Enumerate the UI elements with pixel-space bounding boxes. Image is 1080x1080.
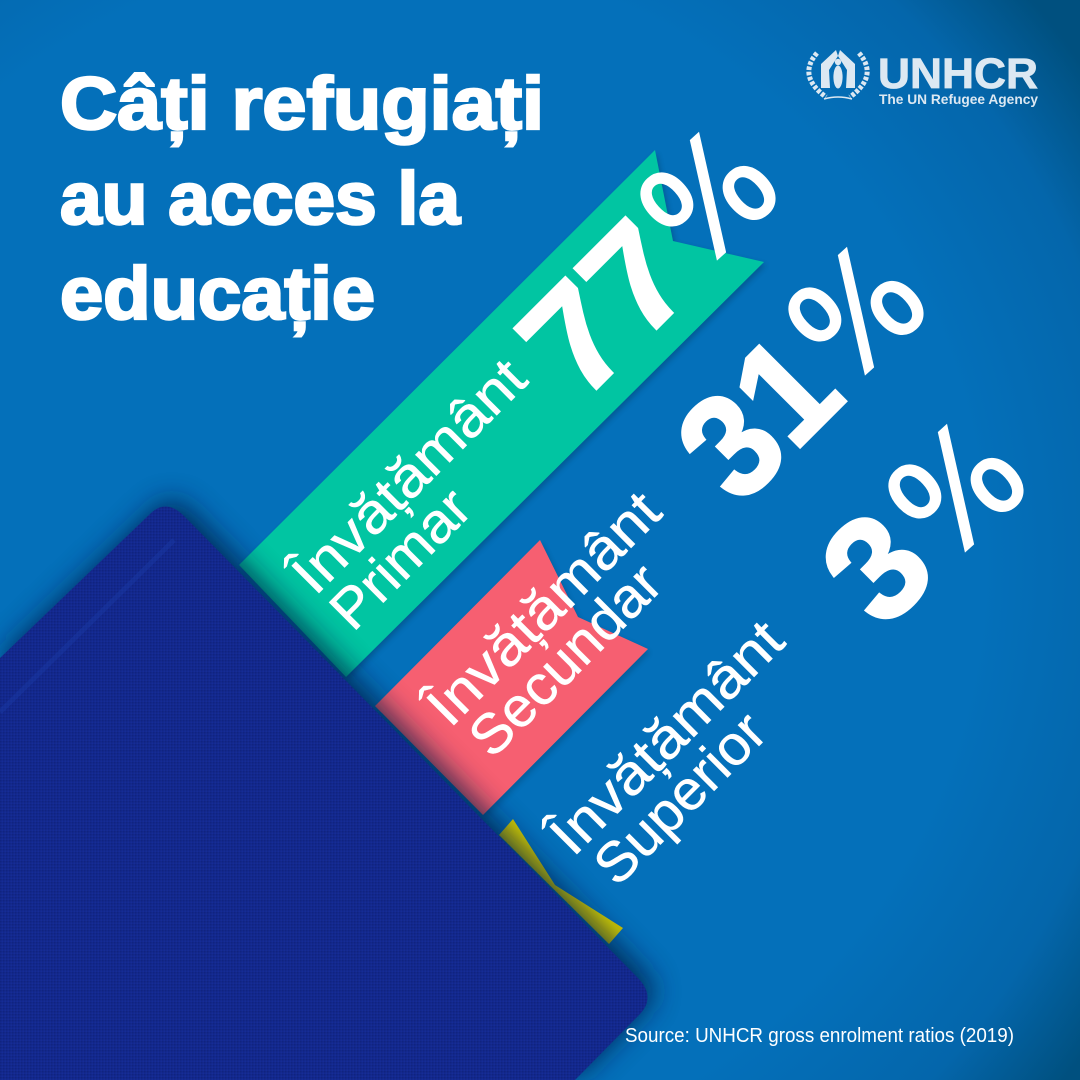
- value: 3%: 3: [790, 481, 963, 654]
- icon: UNHCR emblem: [809, 50, 867, 99]
- title: Câți refugiați: [60, 62, 544, 146]
- title: educație: [60, 252, 375, 336]
- book shadow: [6, 500, 654, 1074]
- value: 31%: 31: [646, 305, 871, 530]
- source note: Source: UNHCR gross enrolment ratios (2019): [625, 1025, 1014, 1047]
- book: [0, 506, 648, 1080]
- title: au acces la: [60, 157, 461, 240]
- ribbon: primary (teal): [239, 150, 766, 680]
- label: Învățământ Primar: Primar: [317, 475, 483, 641]
- label: Învățământ Secundar: Secundar: [456, 551, 674, 768]
- label: Învățământ Primar: Învățământ: [277, 346, 539, 607]
- logo: UNHCR: [809, 50, 1038, 107]
- title: [60, 62, 544, 336]
- value: 31%: %: [757, 211, 958, 415]
- logo tagline: The UN Refugee Agency: [879, 91, 1038, 107]
- value: 3%: [790, 388, 1058, 654]
- ribbon: tertiary (yellow): [499, 819, 623, 944]
- label: Învățământ Superior: Superior: [581, 699, 778, 896]
- label: Învățământ Superior: Învățământ: [535, 607, 796, 868]
- logo wordmark: UNHCR: [878, 50, 1038, 98]
- ribbon: secondary (red): [375, 540, 650, 818]
- value: 77%: 77: [488, 190, 723, 426]
- value: 77%: [488, 96, 810, 426]
- value: 31%: [646, 211, 958, 530]
- label: Învățământ Secundar: Învățământ: [412, 478, 673, 739]
- value: 3%: %: [857, 388, 1058, 592]
- value: 77%: %: [609, 96, 810, 300]
